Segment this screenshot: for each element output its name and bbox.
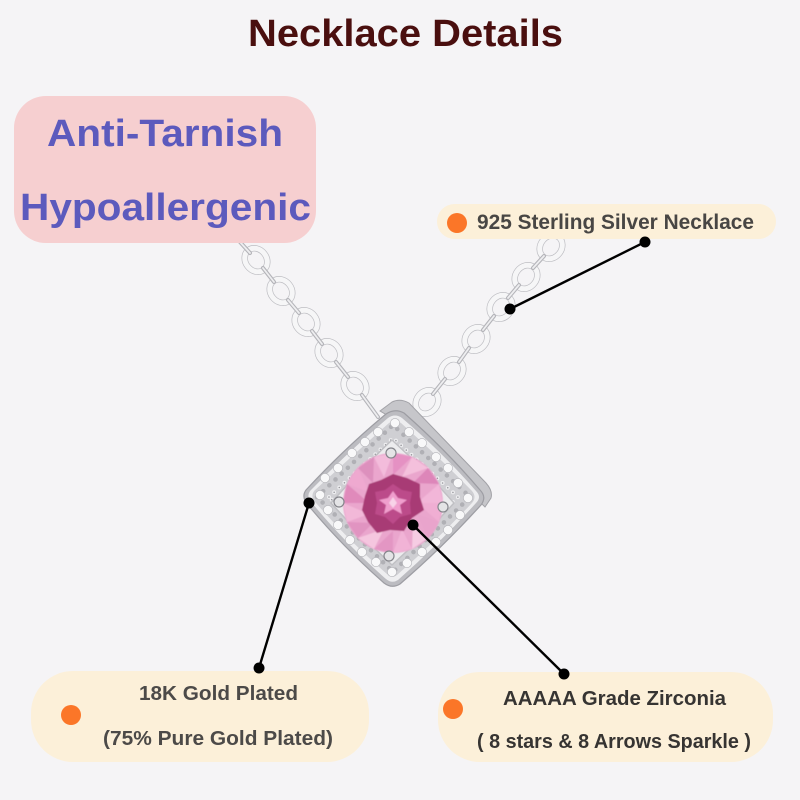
badge: anti-tarnish hypoallergenic: Anti-Tarnish <box>47 113 283 155</box>
callout: zirconia <box>408 520 570 680</box>
halo setting <box>312 421 474 577</box>
badge: anti-tarnish hypoallergenic <box>14 96 316 243</box>
pink gemstone <box>343 453 443 553</box>
callout: plating <box>254 498 314 674</box>
necklace chain <box>240 231 567 418</box>
label: gold plated <box>31 671 369 762</box>
frame highlight <box>308 416 479 582</box>
pendant <box>304 400 491 586</box>
small grey melee stones <box>317 425 470 572</box>
gem dark star <box>362 474 424 533</box>
pendant back plate <box>380 400 491 507</box>
prongs <box>334 448 448 561</box>
inner bezel <box>331 440 454 565</box>
label: zirconia <box>438 672 773 762</box>
label: gold plated: 18K Gold Plated <box>139 683 298 705</box>
label: zirconia: AAAAA Grade Zirconia <box>503 688 727 710</box>
white melee stones <box>315 418 473 577</box>
label: sterling silver <box>437 204 776 239</box>
badge: anti-tarnish hypoallergenic: Hypoallergenic <box>20 187 311 229</box>
callout: chain <box>504 236 650 314</box>
label: sterling silver: 925 Sterling Silver Necklace <box>477 211 754 234</box>
pendant frame <box>304 411 484 586</box>
title: Necklace Details <box>248 13 563 55</box>
label: zirconia: ( 8 stars & 8 Arrows Sparkle ) <box>477 731 751 753</box>
label: gold plated: (75% Pure Gold Plated) <box>103 728 333 750</box>
